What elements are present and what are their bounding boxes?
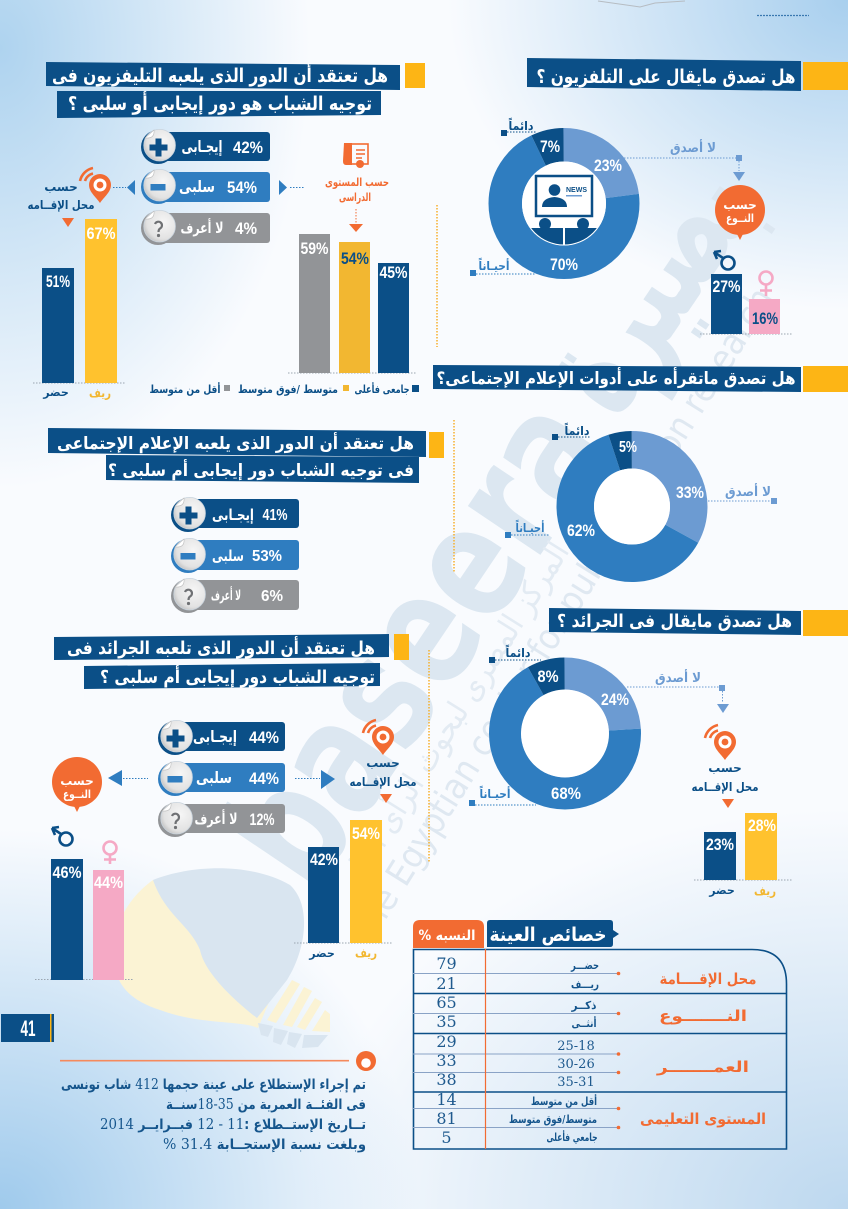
pill: don't know 6%: لا أعرف (211, 586, 241, 604)
bar chart: residence: ريف (89, 386, 111, 400)
donut chart: TV: 70% (550, 255, 578, 274)
label: do not believe with arrow: لا أصدق (670, 139, 716, 156)
bar chart: gender: 16% (752, 309, 778, 328)
pill: negative 53% (171, 538, 299, 573)
donut chart: TV (505, 137, 623, 274)
footer note: survey method (60, 1051, 376, 1153)
bar chart: gender: 44% (94, 873, 123, 892)
donut chart: social media: 62% (567, 522, 595, 540)
pill: negative 53%: سلبى (212, 547, 244, 565)
pill: positive 42%: إيجـابى (182, 137, 222, 156)
bar chart: residence: 67% (86, 224, 116, 243)
divider: third row (428, 650, 430, 862)
table grid (413, 949, 787, 1149)
bar chart: education: 54% (341, 249, 369, 268)
label: by residence: محل الإقــامه (692, 780, 758, 794)
heading: role of newspapers (54, 634, 409, 689)
divider: second row (453, 420, 455, 572)
panel: role of newspapers (35, 634, 416, 980)
icon: male (52, 827, 72, 846)
table sub-categories: أنثــى (572, 1016, 596, 1030)
watermark: english tagline: the Egyptian center for public opinion research (345, 281, 782, 947)
table values: 14 (436, 1090, 457, 1109)
table values: 29 (436, 1032, 457, 1051)
donut chart: TV: 23% (594, 156, 622, 175)
heading: role of TV (46, 62, 425, 118)
label: by residence (692, 761, 758, 808)
pill: negative 54%: سلبى (179, 177, 215, 196)
label: always (552, 422, 590, 440)
table sub-categories: ريـــف (571, 978, 599, 991)
table sub-categories: ذكــر (571, 999, 597, 1012)
legend: education (150, 382, 419, 396)
label: by residence: حسب (708, 761, 742, 775)
pill: positive 41% (171, 497, 299, 532)
donut chart: TV: 7% (540, 137, 560, 156)
table values: 21 (436, 974, 457, 993)
bar chart: residence (33, 219, 126, 400)
pill: negative 44%: 44% (249, 769, 279, 788)
bar chart: residence (694, 813, 793, 898)
label: sometimes (469, 785, 536, 806)
icon: location pin (80, 168, 111, 203)
table values: 65 (436, 993, 457, 1012)
label: by residence: حسب (366, 756, 400, 770)
bar chart: gender (35, 859, 134, 980)
bar chart: education (288, 234, 417, 373)
callout: by gender: النــوع (726, 211, 754, 226)
bar chart: residence: حضر (708, 884, 735, 897)
table sub-categories: 35-31 (557, 1075, 595, 1090)
table categories: العمـــــــر (656, 1058, 749, 1076)
legend: education: أقل من متوسط (150, 382, 220, 396)
bar chart: residence: حضر (308, 947, 335, 960)
icon: TV news presenter: NEWS (566, 185, 587, 194)
bar chart: residence: 51% (46, 272, 70, 291)
label: always (489, 644, 541, 663)
pill: don't know 4%: 4% (235, 219, 257, 238)
pill: don't know 12%: 12% (250, 810, 274, 829)
donut chart: social media (567, 439, 704, 563)
pill: positive 44%: إيجـابى (193, 727, 237, 746)
heading: TV trust (527, 58, 848, 91)
table header: percentage (413, 920, 484, 948)
table sub-categories: حضـــر (570, 959, 599, 972)
icon: location pin (363, 720, 394, 755)
label: by residence (350, 756, 416, 803)
callout: by gender: حسب (723, 198, 757, 212)
table sub-categories (509, 959, 599, 1144)
heading: role of newspapers: توجيه الشباب دور إيجابى أم سلبى ؟ (100, 665, 375, 688)
icon: location pin (705, 725, 736, 760)
label: always: دائماً (506, 644, 530, 660)
bar chart: residence: 54% (352, 824, 380, 843)
heading: role of social media: فى توجيه الشباب دور إيجابى أم سلبى ؟ (108, 459, 414, 481)
bar chart: residence: 23% (706, 835, 734, 854)
bar chart: education: 45% (380, 263, 408, 282)
top edge marks (598, 1, 809, 16)
table categories (640, 970, 766, 1128)
heading: role of TV: هل تعتقد أن الدور الذى يلعبه التليفزيون فى (52, 63, 388, 87)
table values: 38 (436, 1070, 457, 1089)
table sub-categories: متوسط/فوق متوسط (509, 1113, 597, 1126)
page number (1, 1014, 54, 1042)
footer note: survey method: فى الفئــة العمرية من 35-18سنــة (166, 1095, 366, 1113)
table values: 79 (436, 954, 457, 973)
pill: don't know 12% (158, 802, 285, 837)
heading: role of social media: هل تعتقد أن الدور الذى يلعبه الإعلام الإجتماعى (57, 432, 414, 454)
icon: female (104, 842, 116, 864)
table values: 81 (436, 1109, 457, 1128)
pill: positive 42% (141, 129, 270, 164)
donut chart: newspapers: 8% (538, 667, 558, 686)
bar chart: residence: حضر (42, 386, 69, 399)
label: sometimes (505, 519, 550, 538)
label: sometimes (470, 257, 536, 276)
label: do not believe with arrow (627, 669, 729, 713)
donut chart: newspapers: 24% (601, 690, 629, 709)
bar chart: gender: 46% (52, 863, 82, 882)
donut chart: social media: 5% (619, 439, 637, 456)
callout: by gender: حسب (60, 774, 94, 788)
label: always: دائماً (508, 117, 534, 133)
watermark: arabic tagline: المركز المصرى لبحوث الرأى العام (331, 534, 577, 894)
label: by education: الدراسى (339, 190, 371, 204)
callout: by gender (52, 757, 102, 812)
pill: positive 42%: 42% (233, 138, 263, 157)
pill: negative 44% (158, 761, 285, 796)
background watermark (113, 127, 791, 1048)
table categories: النـــــــوع (659, 1007, 747, 1025)
arrow: to gender (108, 770, 148, 786)
bar chart: residence (294, 820, 393, 960)
watermark: baseera wordmark: baseera (187, 364, 644, 916)
pill: negative 44%: سلبى (196, 768, 232, 787)
donut chart: social media: 33% (676, 484, 704, 502)
icon: certificate (343, 143, 368, 168)
bar chart: residence: ريف (355, 946, 377, 960)
pill: positive 41%: 41% (262, 507, 288, 524)
table sub-categories: أقل من متوسط (531, 1094, 597, 1108)
callout: by gender: النــوع (63, 787, 91, 802)
arrow: to residence (295, 770, 335, 789)
pill: don't know 12%: لا أعرف (194, 809, 238, 828)
table categories: محل الإقــــامة (660, 970, 756, 988)
callout: by gender (715, 185, 765, 240)
label: by residence: محل الإقــامه (28, 198, 94, 212)
panel: role of social media (48, 428, 444, 613)
pill: positive 41%: إيجـابى (212, 506, 254, 524)
label: do not believe with arrow (624, 139, 745, 181)
heading: social media trust: هل تصدق ماتقرأه على أدوات الإعلام الإجتماعى؟ (436, 367, 796, 389)
icon: female (760, 272, 772, 296)
bar chart: residence: 42% (310, 850, 338, 869)
panel: role of TV (28, 62, 425, 400)
label: by residence (28, 180, 94, 227)
footer note: survey method: تم إجراء الإستطلاع على عينة حجمها 412 شاب تونسى (61, 1075, 366, 1093)
pill: don't know 6% (171, 578, 299, 613)
table sub-categories: 30-26 (557, 1057, 595, 1072)
page number: 41 (20, 1016, 36, 1041)
table values (436, 954, 457, 1147)
panel: social media trust (433, 365, 848, 563)
table values: 33 (436, 1051, 457, 1070)
label: always (501, 117, 537, 136)
arrow: to education (279, 180, 305, 195)
donut chart: newspapers: 68% (551, 784, 581, 803)
divider: first row (436, 205, 438, 347)
heading: role of TV: توجيه الشباب هو دور إيجابى أو سلبى ؟ (68, 91, 372, 115)
icon: male (714, 251, 734, 270)
bar chart: residence: 28% (748, 816, 776, 835)
table values: 35 (436, 1012, 457, 1031)
table header: percentage: النسبه % (418, 928, 476, 944)
table sub-categories: 25-18 (557, 1039, 595, 1054)
table header: sample characteristics: خصائص العينة (490, 924, 606, 946)
table values: 5 (441, 1128, 452, 1147)
pill: positive 44%: 44% (249, 728, 279, 747)
bar chart: gender: 27% (712, 277, 740, 296)
label: sometimes: أحيـاناً (516, 519, 544, 535)
arrow: to residence (113, 180, 135, 195)
table sub-categories: جامعي فأعلى (546, 1130, 598, 1144)
panel: newspapers trust (469, 608, 848, 898)
label: by residence: حسب (44, 180, 78, 194)
donut chart: newspapers (505, 667, 629, 803)
pill: negative 54% (141, 169, 270, 204)
label: do not believe: لا أصدق (725, 483, 771, 500)
panel: TV trust (470, 58, 848, 334)
label: do not believe (708, 483, 777, 504)
heading: role of social media (48, 428, 444, 483)
heading: role of newspapers: هل تعتقد أن الدور الذى تلعبه الجرائد فى (67, 636, 375, 659)
label: always: دائماً (564, 422, 590, 438)
bar chart: education: 59% (300, 239, 328, 258)
bar chart: residence: ريف (754, 884, 776, 898)
pill: negative 53%: 53% (252, 548, 282, 565)
heading: newspapers trust (549, 608, 848, 636)
label: by education (325, 175, 389, 232)
pill: don't know 6%: 6% (261, 588, 283, 605)
label: do not believe with arrow: لا أصدق (655, 669, 701, 686)
label: sometimes: أحيـاناً (478, 257, 510, 273)
label: sometimes: أحيـاناً (480, 785, 510, 801)
pill: positive 44% (158, 720, 285, 755)
label: by education: حسب المستوى (325, 175, 389, 190)
pill: don't know 4%: لا أعرف (180, 218, 224, 237)
footer note: survey method: تــاريخ الإستــطلاع :11 - 12 فبــرايــر 2014 (100, 1115, 366, 1133)
bar chart: gender (700, 274, 792, 334)
icon: TV news presenter (531, 174, 597, 244)
legend: education: متوسط /فوق متوسط (238, 383, 338, 396)
label: by residence: محل الإقــامه (350, 775, 416, 789)
panel: sample characteristics table (413, 920, 787, 1149)
heading: newspapers trust: هل تصدق مايقال فى الجرائد ؟ (557, 611, 792, 632)
legend: education: جامعى فأعلى (354, 382, 410, 396)
watermark: bulb (113, 868, 330, 1048)
footer note: survey method: وبلغت نسبة الإستجــابة 31.4 % (163, 1135, 366, 1153)
pill: negative 54%: 54% (227, 178, 257, 197)
table categories: المستوى التعليمى (640, 1110, 766, 1128)
pill: don't know 4% (141, 210, 270, 245)
